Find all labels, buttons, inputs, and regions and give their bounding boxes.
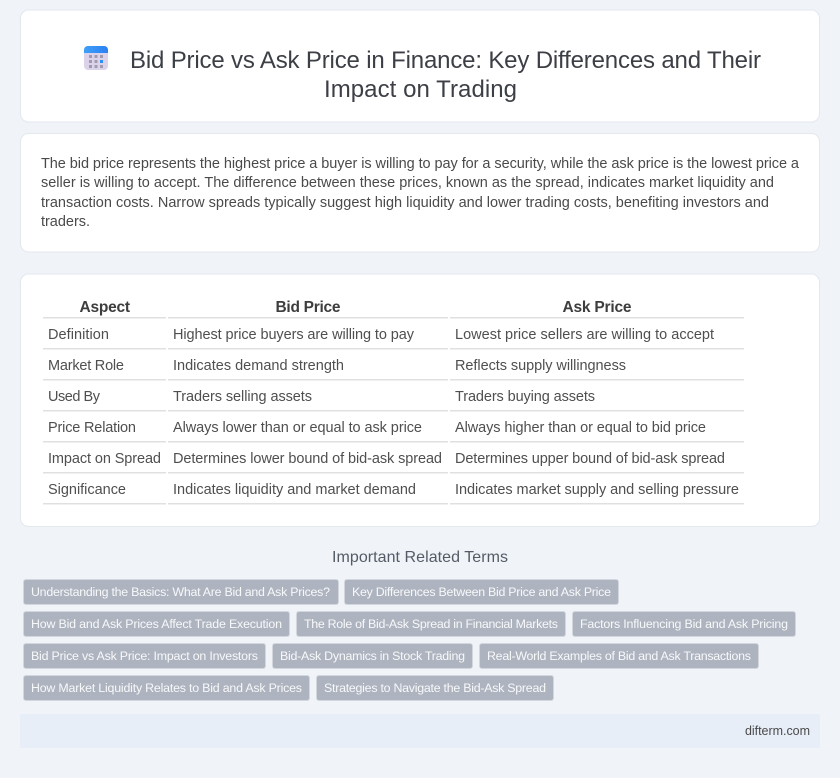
related term tags: Key Differences Between Bid Price and Ask Price	[352, 585, 611, 599]
row: used by	[48, 389, 595, 405]
row: market role	[48, 358, 626, 374]
row: impact on spread: Impact on Spread	[48, 451, 161, 467]
text block: summary: traders.	[41, 214, 90, 230]
row: significance: Indicates liquidity and market demand	[173, 482, 416, 498]
row: definition: Definition	[48, 327, 109, 343]
related term tags	[24, 580, 796, 700]
row: price relation: Always lower than or equal to ask price	[173, 420, 422, 436]
row: impact on spread: Determines lower bound of bid-ask spread	[173, 451, 442, 467]
panel: header	[20, 10, 820, 122]
table header	[80, 299, 632, 316]
text block: summary	[41, 156, 800, 230]
related term tags: How Market Liquidity Relates to Bid and Ask Prices	[31, 681, 302, 695]
panel: comparison table	[20, 274, 820, 526]
row: definition: Highest price buyers are willing to pay	[173, 327, 415, 343]
row: significance: Significance	[48, 482, 126, 498]
heading: important related terms: Important Related Terms	[332, 549, 508, 566]
related term tags: Bid-Ask Dynamics in Stock Trading	[280, 649, 465, 663]
row: impact on spread	[48, 451, 725, 467]
panel: summary paragraph	[20, 134, 820, 252]
row: market role: Market Role	[48, 358, 124, 374]
table header: Aspect	[80, 299, 130, 316]
table header: Bid Price	[276, 299, 341, 316]
row: definition: Lowest price sellers are willing to accept	[455, 327, 714, 343]
row: significance: Indicates market supply and selling pressure	[455, 482, 739, 498]
row: used by: Used By	[48, 389, 101, 405]
text block: summary: transaction costs. Narrow spreads typically suggest high liquidity and lower trading costs, benefiting investors and	[41, 195, 769, 211]
row: price relation: Price Relation	[48, 420, 136, 436]
text block: summary: The bid price represents the highest price a buyer is willing to pay for a security, while the ask price is the lowest price a	[41, 156, 800, 172]
related term tags: The Role of Bid-Ask Spread in Financial Markets	[304, 617, 558, 631]
title: Bid Price vs Ask Price in Finance: Key Differences and Their	[130, 47, 761, 74]
row: price relation	[48, 420, 706, 436]
row: market role: Indicates demand strength	[173, 358, 344, 374]
row: market role: Reflects supply willingness	[455, 358, 626, 374]
related term tags: Understanding the Basics: What Are Bid and Ask Prices?	[31, 585, 330, 599]
related term tags: Real-World Examples of Bid and Ask Transactions	[487, 649, 751, 663]
row: used by: Traders buying assets	[455, 389, 595, 405]
title	[130, 47, 761, 103]
row: price relation: Always higher than or equal to bid price	[455, 420, 706, 436]
related term tags: Factors Influencing Bid and Ask Pricing	[580, 617, 788, 631]
row: used by: Traders selling assets	[173, 389, 312, 405]
related term tags: How Bid and Ask Prices Affect Trade Execution	[31, 617, 282, 631]
table header: Ask Price	[562, 299, 632, 316]
footer bar	[20, 714, 820, 748]
text block: summary: seller is willing to accept. The difference between these prices, known as the spread, indicates market liquidity and	[41, 175, 774, 191]
row: impact on spread: Determines upper bound of bid-ask spread	[455, 451, 725, 467]
title: Impact on Trading	[324, 76, 517, 103]
related term tags: Strategies to Navigate the Bid-Ask Spread	[324, 681, 546, 695]
icon: calendar	[84, 46, 108, 70]
related term tags: Bid Price vs Ask Price: Impact on Investors	[31, 649, 258, 663]
footer site name: difterm.com	[745, 724, 810, 738]
row: definition	[48, 327, 714, 343]
row: significance	[48, 482, 739, 498]
